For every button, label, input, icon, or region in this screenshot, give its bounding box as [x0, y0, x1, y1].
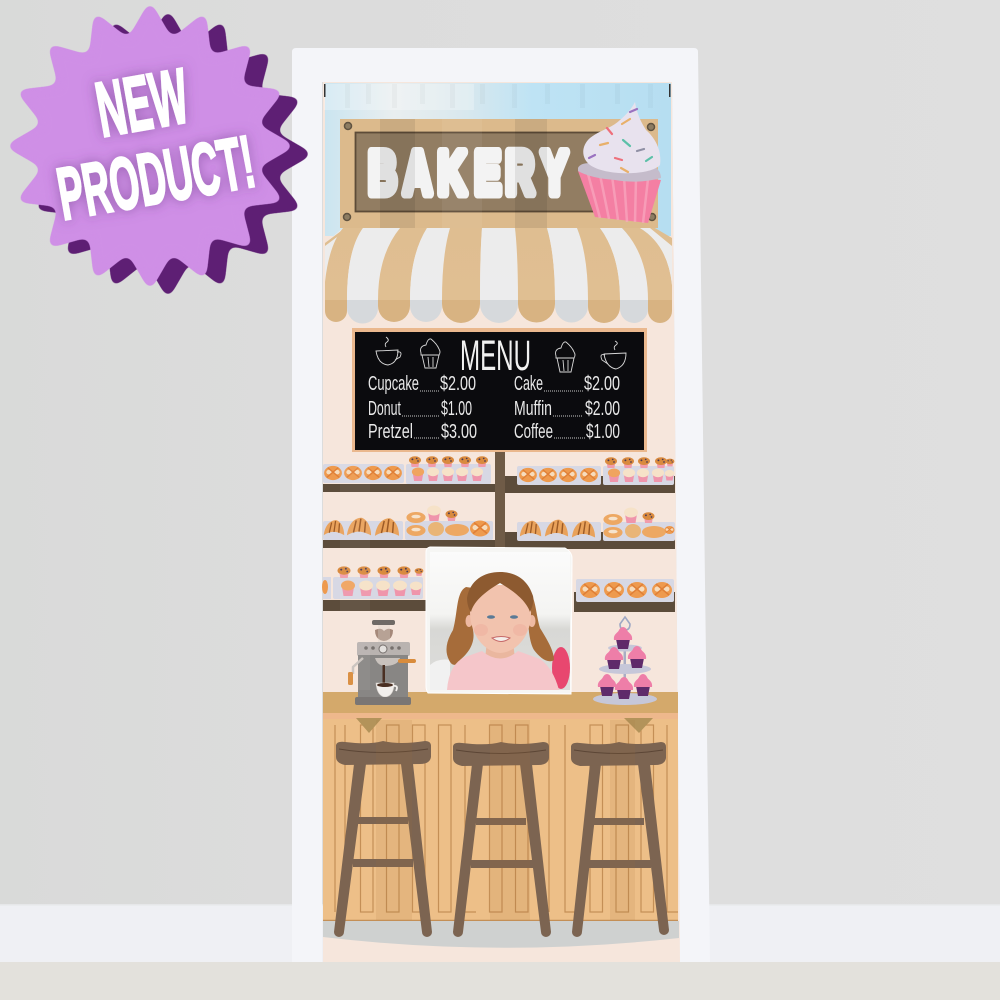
chalkboard frame — [352, 328, 647, 452]
price list left column: $3.00 — [441, 421, 477, 443]
shelf post — [495, 452, 505, 547]
shelf 2 left tray: croissants — [323, 518, 403, 540]
left pigtail — [446, 587, 474, 665]
badge shadow star — [22, 8, 314, 300]
photo window with girl — [426, 547, 572, 694]
shelf 2 right tray: mixed pastries — [603, 508, 675, 541]
icon: chalk coffee cup left — [376, 337, 401, 365]
counter edge — [323, 713, 678, 719]
new product badge — [4, 0, 314, 300]
badge text: PRODUCT! — [51, 120, 261, 236]
price list right column: $2.00 — [585, 398, 620, 420]
shelf 2 right tray: croissants — [517, 520, 601, 541]
icon: chalk cupcake left — [421, 339, 440, 368]
icon: espresso machine — [348, 620, 416, 705]
floor — [0, 962, 1000, 1000]
ears — [466, 615, 536, 627]
wood panel front — [323, 719, 678, 921]
blurred white kitchen object — [430, 660, 450, 690]
badge star — [4, 0, 296, 292]
price list left column: Cupcake — [368, 373, 419, 395]
chalkboard heading: MENU — [460, 332, 531, 380]
badge text: NEW — [90, 51, 195, 154]
price list left column: Donut — [368, 398, 401, 420]
shelf 1 left tray: pretzels — [323, 464, 404, 483]
sign title: BAKERY — [368, 139, 568, 206]
bar stool 1 — [334, 741, 432, 937]
shelf 1 right tray: pretzels — [517, 466, 601, 485]
pink toy — [552, 647, 570, 689]
bar stool 3 — [571, 742, 669, 937]
curtain base fabric — [323, 82, 680, 962]
cheeks — [474, 624, 527, 636]
icon: cupcake stand — [593, 617, 657, 705]
photo background — [430, 552, 570, 690]
counter top — [323, 692, 678, 713]
eyes — [487, 615, 518, 619]
awning — [325, 228, 672, 324]
bar stool 2 — [453, 742, 551, 937]
shelf 1 right tray: cupcakes and muffins — [603, 457, 674, 485]
right pigtail — [528, 592, 554, 661]
price list left column — [368, 373, 477, 443]
price list right column: Muffin — [514, 398, 552, 420]
floor strip — [323, 921, 679, 948]
badge text — [51, 51, 261, 236]
hair top — [467, 572, 533, 612]
sign board — [340, 119, 658, 228]
shelf unit — [323, 452, 675, 612]
sign inner panel — [356, 132, 600, 212]
wood panel planks — [323, 725, 678, 920]
shelf 3 right tray: pretzels — [576, 579, 674, 602]
baseboard — [0, 904, 1000, 962]
sign screws — [344, 122, 656, 220]
sky backdrop with clouds — [325, 83, 671, 236]
bracket right — [624, 718, 653, 733]
counter — [323, 692, 679, 948]
price list left column: $1.00 — [441, 398, 472, 420]
price list right column: Cake — [514, 373, 543, 395]
price list left column: $2.00 — [440, 373, 476, 395]
shirt — [447, 651, 559, 690]
neck — [485, 640, 515, 664]
price list right column: Coffee — [514, 421, 553, 443]
shelf 2 tray: mixed pastries — [405, 506, 493, 540]
curtain fold shading — [340, 119, 635, 920]
curtain rod pocket — [324, 84, 670, 110]
price list right column: $2.00 — [584, 373, 620, 395]
icon: chalk cupcake right — [556, 342, 575, 372]
door frame — [292, 48, 710, 962]
shelf 3 left tray: cupcakes and muffins — [322, 566, 423, 599]
price list left column: Pretzel — [368, 421, 413, 443]
price list right column — [514, 373, 620, 443]
bracket left — [356, 718, 382, 733]
door curtain — [322, 82, 680, 962]
shelf 1 tray: cupcakes and muffins — [406, 456, 491, 484]
icon: chalk coffee cup right — [601, 341, 626, 369]
bakery sign — [340, 119, 658, 228]
price list right column: $1.00 — [586, 421, 620, 443]
smile — [492, 636, 510, 642]
menu chalkboard — [352, 328, 647, 452]
window border — [426, 547, 572, 694]
face — [470, 585, 531, 653]
shelf boards — [323, 476, 675, 612]
icon: sign cupcake — [578, 102, 661, 223]
chalkboard surface — [355, 332, 644, 450]
